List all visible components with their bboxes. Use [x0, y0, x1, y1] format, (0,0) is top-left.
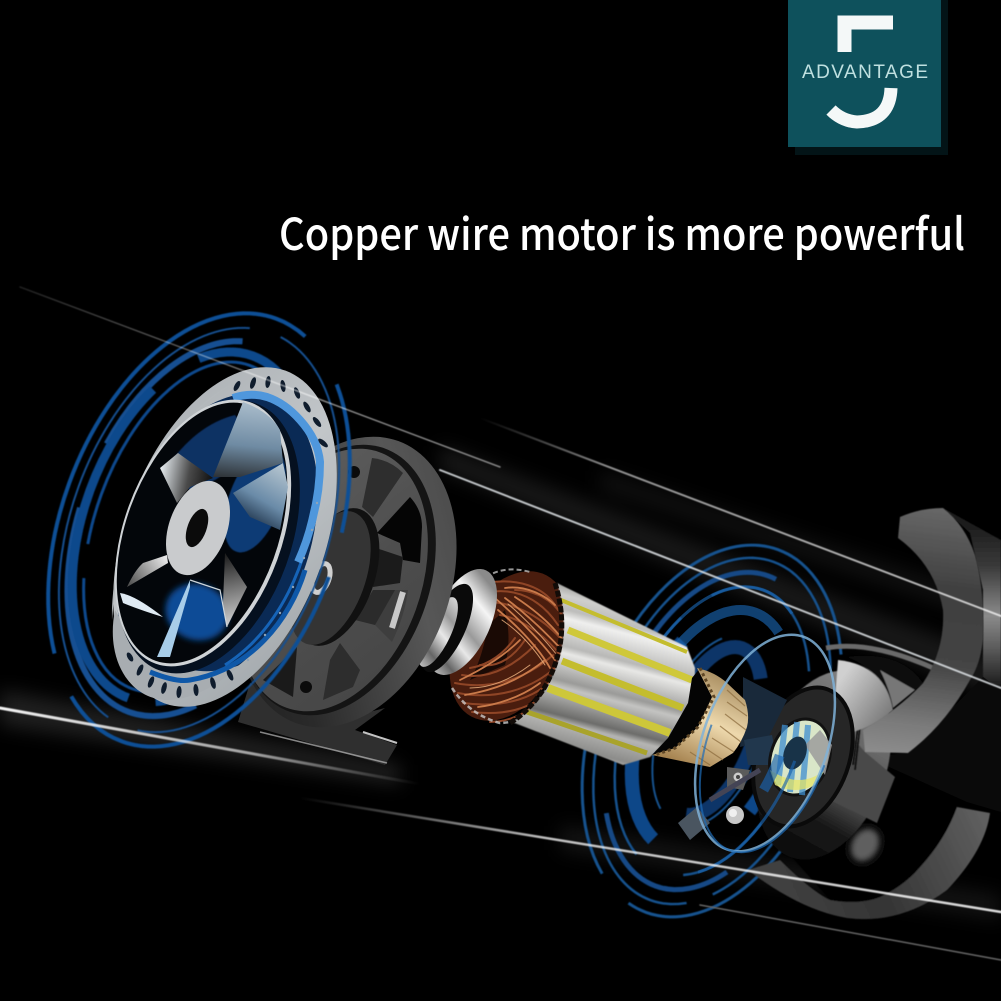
central boss	[276, 496, 396, 658]
front fan: blue holographic rings	[0, 271, 406, 789]
lens plate and brush assembly	[678, 674, 871, 840]
mounting foot	[238, 683, 397, 765]
interior blue shading	[157, 415, 298, 649]
saturated blue band at lower right	[150, 570, 305, 681]
blades	[213, 402, 283, 477]
copper windings	[426, 551, 592, 741]
dome and rim inside the C-shaped cap	[826, 646, 933, 733]
back plate of motor	[199, 406, 495, 765]
face of plate	[203, 417, 471, 743]
front thin ring over brush area	[668, 616, 863, 871]
blue rings overlay over brush assembly	[578, 560, 846, 902]
yellow stripes	[527, 600, 692, 753]
badge: advantage 5: ADVANTAGE	[802, 62, 928, 83]
numeral 5	[831, 22, 893, 122]
dark navy band on right side	[79, 366, 355, 714]
silver overlay on left and bottom	[113, 610, 240, 700]
outer rim	[199, 406, 495, 758]
silver perforated ring	[70, 336, 380, 738]
slots	[125, 376, 329, 698]
bearing and shaft	[410, 559, 511, 685]
right housing: black cylinder body	[867, 677, 1001, 812]
small lens disc	[759, 710, 841, 804]
serrated winding edge	[452, 688, 548, 723]
badge: advantage 5	[788, 0, 948, 155]
right housing: large lower ring	[748, 790, 990, 919]
front fan disk	[70, 336, 380, 738]
white rim	[81, 375, 325, 691]
dark gap ring	[81, 375, 335, 699]
gray motor housing	[732, 652, 916, 878]
background light streak glows	[0, 445, 1001, 920]
gold commutator	[652, 668, 748, 767]
small dots on right band	[247, 502, 318, 661]
plate windows	[263, 458, 422, 700]
small silver collar	[308, 561, 334, 595]
second set of blue holographic rings	[534, 509, 890, 953]
diagonal white light streaks	[0, 287, 1001, 960]
right housing: outer cylinder band	[943, 508, 1001, 692]
armature silver rotor with yellow stripes	[510, 583, 695, 765]
center hub washer	[154, 472, 242, 584]
right housing: C-shaped end cap	[863, 508, 983, 753]
light blue band at top right	[233, 395, 320, 562]
